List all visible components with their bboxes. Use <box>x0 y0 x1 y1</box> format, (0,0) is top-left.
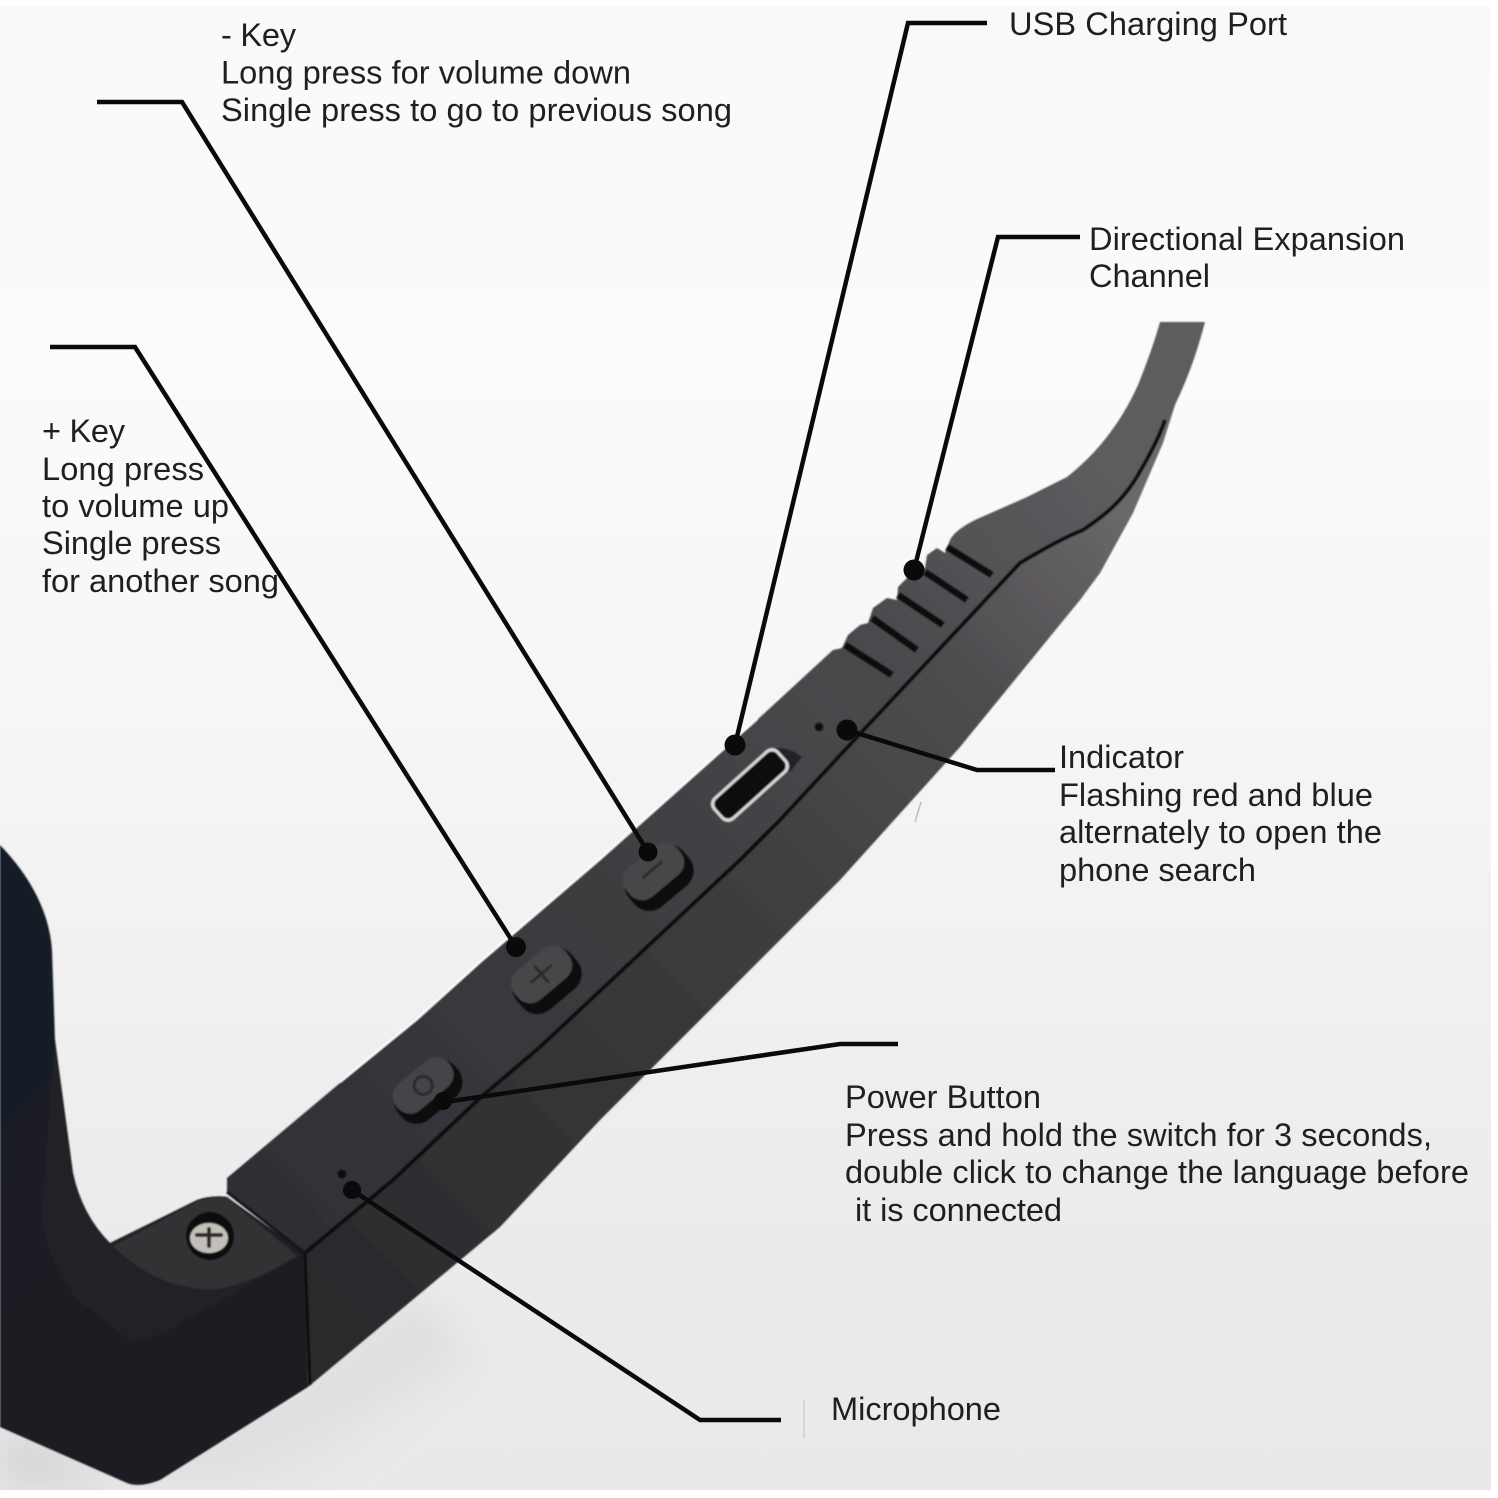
leader: usb port <box>724 23 987 756</box>
ventilation slots <box>845 547 992 675</box>
leader: power button <box>434 1044 898 1110</box>
label: power button: Power Button <box>845 1078 1041 1115</box>
label: power button: double click to change the language before <box>845 1153 1469 1190</box>
label: directional expansion channel <box>1089 220 1405 294</box>
leader: microphone <box>343 1181 781 1420</box>
soft shadow under frame <box>0 1300 480 1490</box>
screw <box>186 1212 234 1260</box>
leader: minus key <box>97 102 658 862</box>
leader: expansion channel <box>904 237 1080 580</box>
label: directional expansion channel: Directional Expansion <box>1089 220 1405 257</box>
usb port <box>707 744 802 826</box>
power button <box>384 1049 471 1132</box>
label: indicator: Flashing red and blue <box>1059 776 1373 813</box>
minus button <box>614 834 702 919</box>
label: minus key <box>221 16 732 128</box>
label: indicator <box>1059 738 1382 888</box>
label: indicator: Indicator <box>1059 738 1184 775</box>
label: plus key: Single press <box>42 524 221 561</box>
label: power button: Press and hold the switch for 3 seconds, <box>845 1116 1432 1153</box>
label: indicator: alternately to open the <box>1059 813 1382 850</box>
plus button <box>502 937 590 1022</box>
label: microphone: Microphone <box>831 1390 1001 1427</box>
label: power button <box>845 1078 1469 1228</box>
label: directional expansion channel: Channel <box>1089 257 1210 294</box>
top edge highlight <box>340 719 757 1082</box>
label: power button: it is connected <box>855 1191 1062 1228</box>
label: plus key: to volume up <box>42 487 229 524</box>
stray marks <box>915 802 921 822</box>
label: minus key: Long press for volume down <box>221 54 631 90</box>
label: plus key: Long press <box>42 450 204 487</box>
label: indicator: phone search <box>1059 851 1256 888</box>
label: plus key <box>42 412 279 599</box>
label: plus key: + Key <box>42 412 126 449</box>
label: minus key: Single press to go to previous song <box>221 91 732 128</box>
body seam lines <box>305 420 1165 1253</box>
leader: plus key <box>50 347 526 957</box>
temple top face <box>227 322 1205 1253</box>
temple side face <box>305 322 1203 1387</box>
label: minus key: - Key <box>221 16 297 53</box>
glasses temple arm <box>0 322 1205 1485</box>
label: plus key: for another song <box>42 562 279 599</box>
leader: indicator <box>836 720 1055 770</box>
indicator pinhole <box>814 722 824 732</box>
microphone pinhole <box>338 1170 346 1178</box>
frame hinge block <box>0 845 308 1485</box>
label: usb charging port: USB Charging Port <box>1009 5 1287 42</box>
